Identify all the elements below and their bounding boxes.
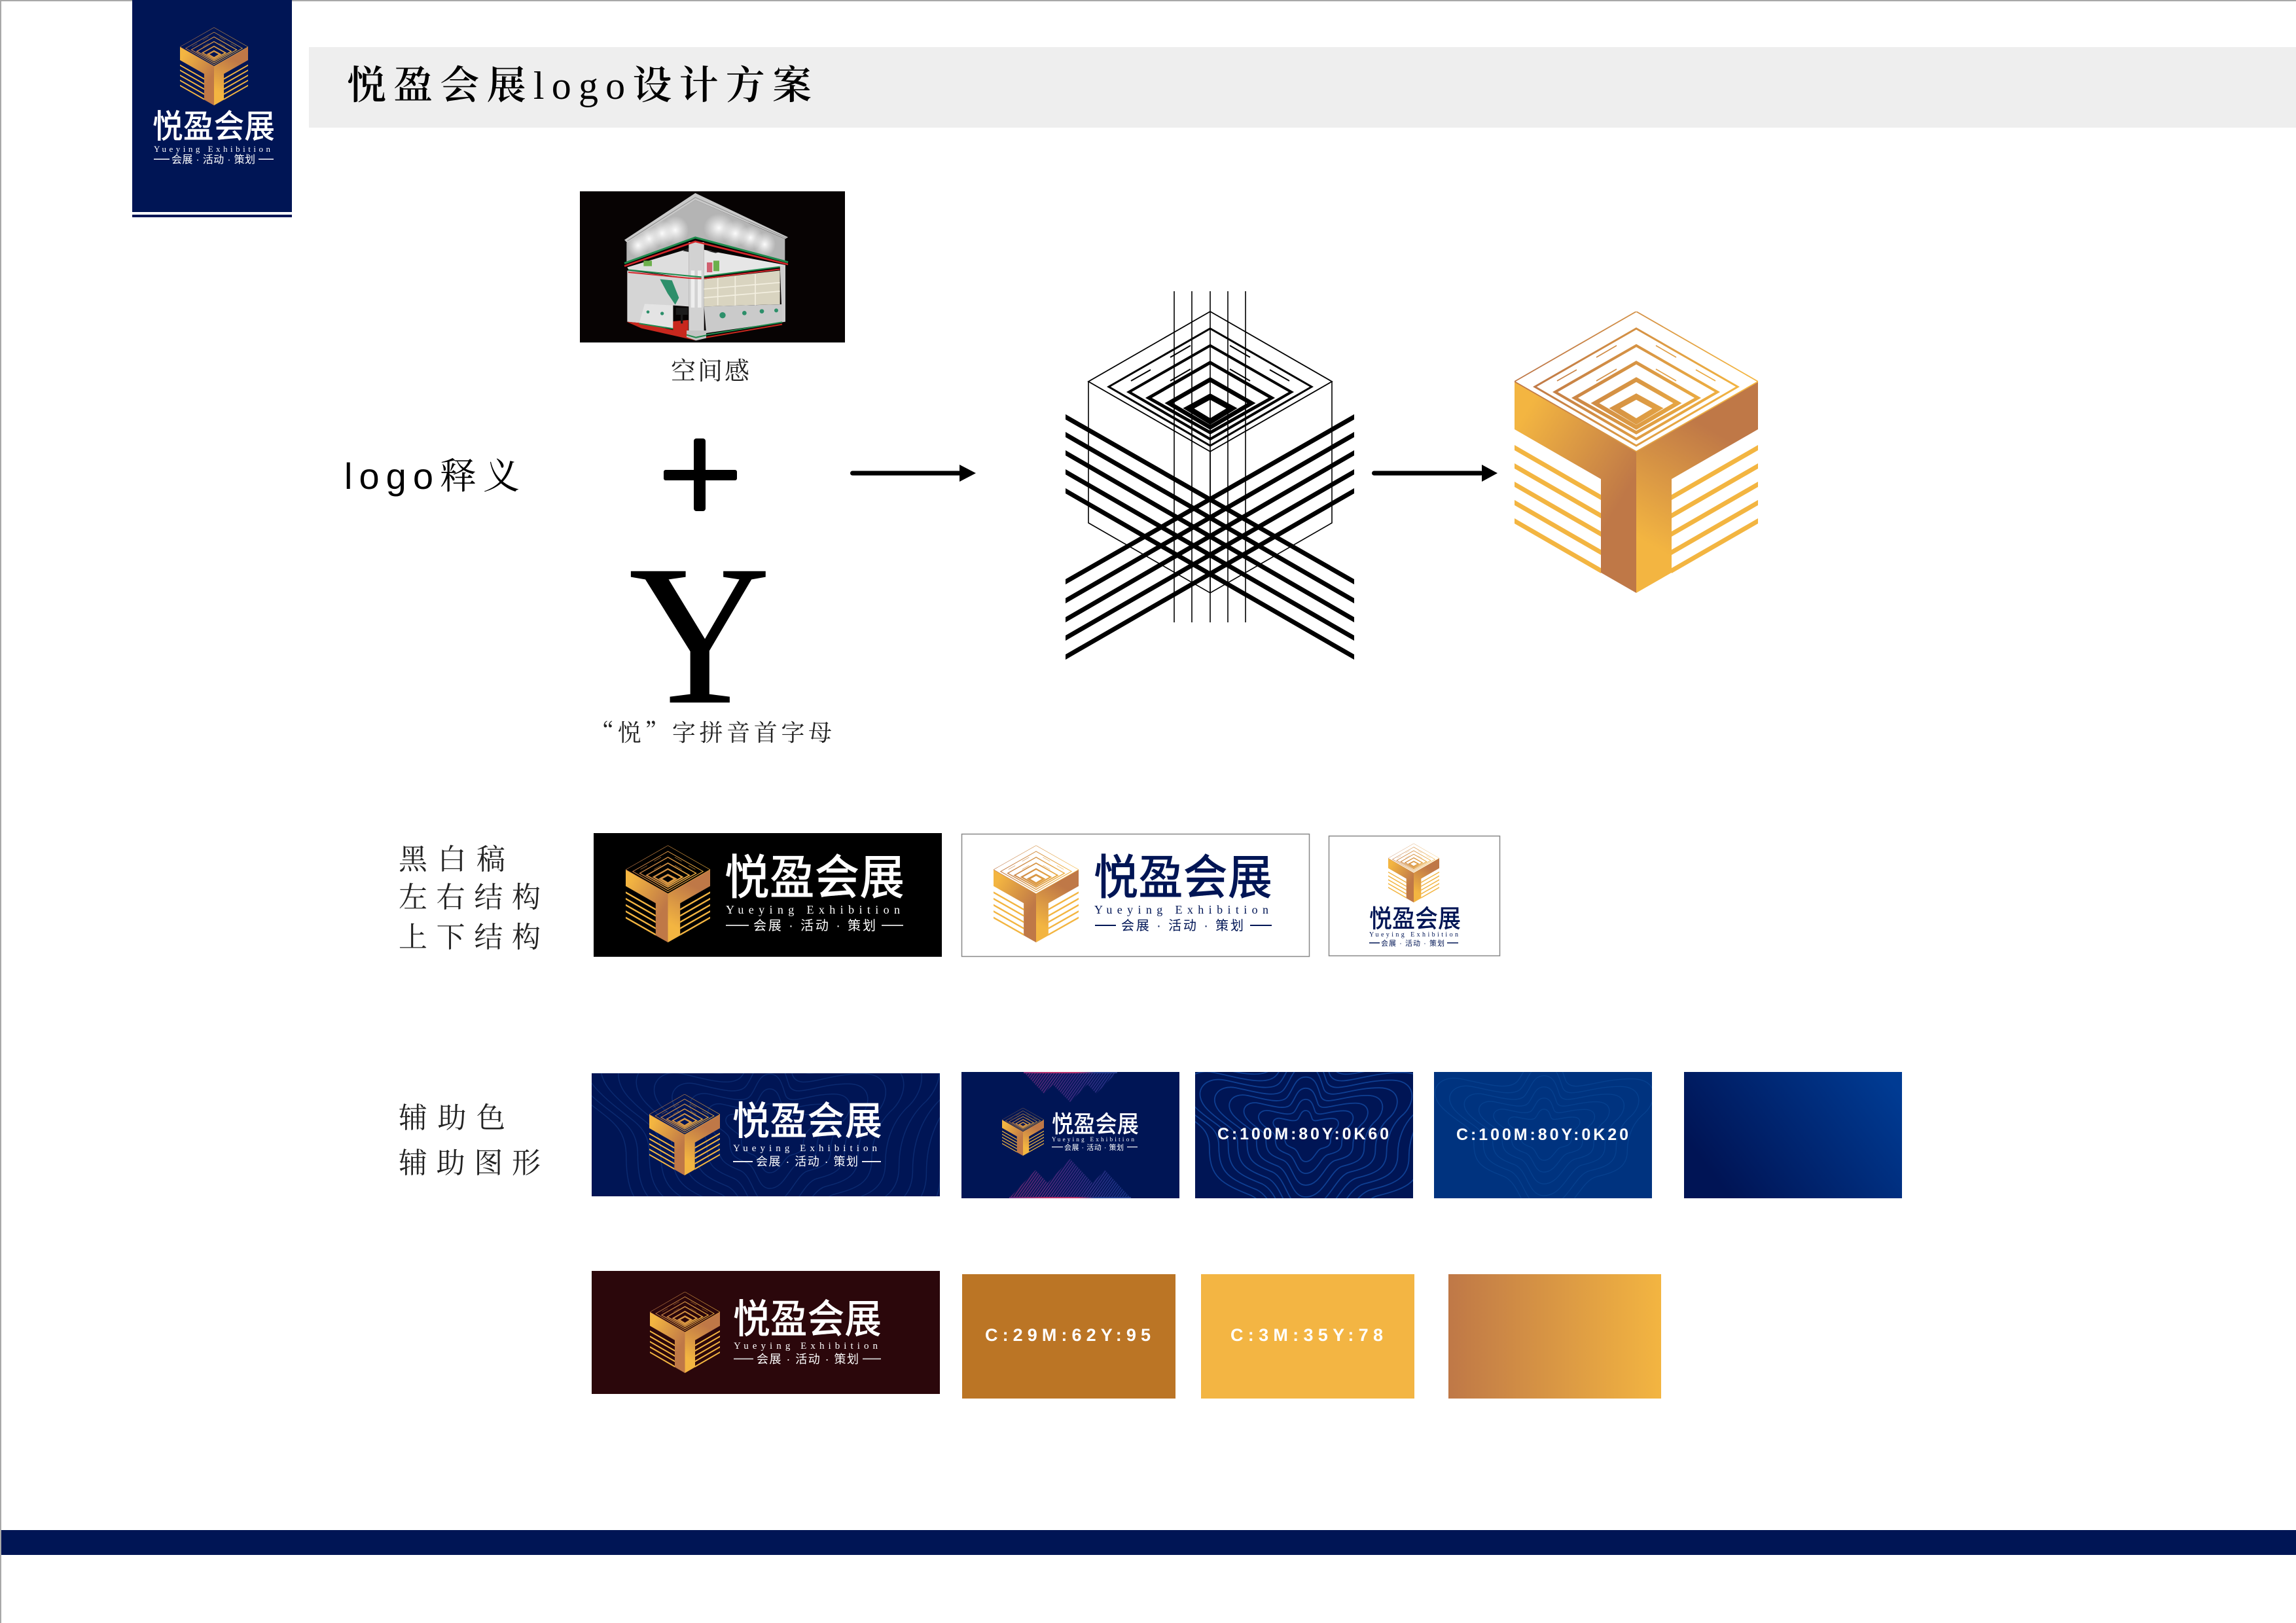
heading: logo meaning: logo释义 xyxy=(344,455,520,497)
panel: gold gradient swatch xyxy=(1448,1274,1661,1399)
image: exhibition booth xyxy=(580,191,845,342)
panel: swatch gold xyxy=(1201,1274,1414,1399)
labels: auxiliary color and graphics: 辅助图形 xyxy=(399,1147,541,1179)
panel: logo on dark maroon: 会展 · 活动 · 策划 xyxy=(757,1353,859,1366)
panel: swatch brown: C:29M:62Y:95 xyxy=(985,1325,1151,1345)
icon: plus xyxy=(664,438,737,511)
sidebar tagline: 会展 · 活动 · 策划 xyxy=(171,154,255,166)
sidebar english name: Yueying Exhibition xyxy=(154,144,271,154)
panel: swatch C100 M80 Y0 K20 xyxy=(1434,1072,1652,1198)
panel: logo on dark maroon xyxy=(592,1271,940,1394)
labels: black and white, layouts: 左右结构 xyxy=(399,882,541,914)
large gold logo mark xyxy=(1515,312,1758,593)
icon: sidebar logo mark xyxy=(180,27,248,105)
panel: logo on white vertical: Yueying Exhibition xyxy=(1369,931,1458,938)
letter Y: Y xyxy=(629,525,770,746)
panel: logo with triangle graphics xyxy=(961,1072,1179,1198)
panel: logo on white horizontal: 会展 · 活动 · 策划 xyxy=(1121,918,1244,933)
labels: auxiliary color and graphics: 辅助色 xyxy=(399,1102,505,1134)
caption: space: 空间感 xyxy=(671,358,749,385)
panel: logo on white vertical: 悦盈会展 xyxy=(1369,906,1461,933)
caption: Y initial: “悦”字拼音首字母 xyxy=(590,715,832,748)
panel: logo with triangle graphics: Yueying Exhibition xyxy=(1052,1136,1135,1143)
panel: logo on navy contour: 会展 · 活动 · 策划 xyxy=(756,1155,858,1168)
panel: logo with triangle graphics: 会展 · 活动 · 策划 xyxy=(1064,1143,1124,1152)
wireframe construction xyxy=(1066,291,1354,660)
panel: logo on navy contour: 悦盈会展 xyxy=(732,1099,882,1143)
panel: logo on dark maroon: Yueying Exhibition xyxy=(734,1341,878,1351)
panel: logo with triangle graphics: 悦盈会展 xyxy=(1052,1111,1139,1137)
sidebar wordmark: 悦盈会展 xyxy=(152,109,275,145)
arrow 1 xyxy=(850,465,976,482)
sidebar logo panel xyxy=(132,0,292,217)
panel: logo on black: 会展 · 活动 · 策划 xyxy=(753,918,876,933)
panel: logo on navy contour xyxy=(592,1073,940,1196)
title bar xyxy=(309,47,2296,128)
panel: swatch brown xyxy=(962,1274,1175,1399)
panel: logo on dark maroon: 悦盈会展 xyxy=(733,1297,882,1342)
panel: logo on black: 悦盈会展 xyxy=(725,851,905,904)
arrow 2 xyxy=(1372,465,1498,482)
panel: swatch C100 M80 Y0 K20: C:100M:80Y:0K20 xyxy=(1456,1126,1628,1144)
panel: logo on black xyxy=(594,833,942,957)
panel: logo on white vertical: 会展 · 活动 · 策划 xyxy=(1381,938,1444,948)
footer bar xyxy=(1,1530,2296,1555)
panel: logo on white horizontal: Yueying Exhibition xyxy=(1094,903,1268,916)
panel: swatch gold: C:3M:35Y:78 xyxy=(1230,1325,1383,1345)
panel: logo on white horizontal: 悦盈会展 xyxy=(1094,851,1272,904)
panel: blue gradient swatch xyxy=(1684,1072,1902,1198)
panel: logo on white vertical xyxy=(1329,836,1500,955)
panel: logo on white horizontal xyxy=(962,834,1309,957)
labels: black and white, layouts: 黑白稿 xyxy=(399,844,505,876)
labels: black and white, layouts xyxy=(399,844,541,954)
panel: swatch C100 M80 Y0 K60: C:100M:80Y:0K60 xyxy=(1217,1125,1389,1143)
panel: swatch C100 M80 Y0 K60 xyxy=(1195,1072,1413,1198)
title: 悦盈会展logo设计方案 xyxy=(347,64,812,107)
panel: logo on navy contour: Yueying Exhibition xyxy=(733,1143,877,1154)
panel: logo on black: Yueying Exhibition xyxy=(726,903,900,916)
labels: auxiliary color and graphics xyxy=(399,1102,541,1179)
labels: black and white, layouts: 上下结构 xyxy=(399,921,541,954)
